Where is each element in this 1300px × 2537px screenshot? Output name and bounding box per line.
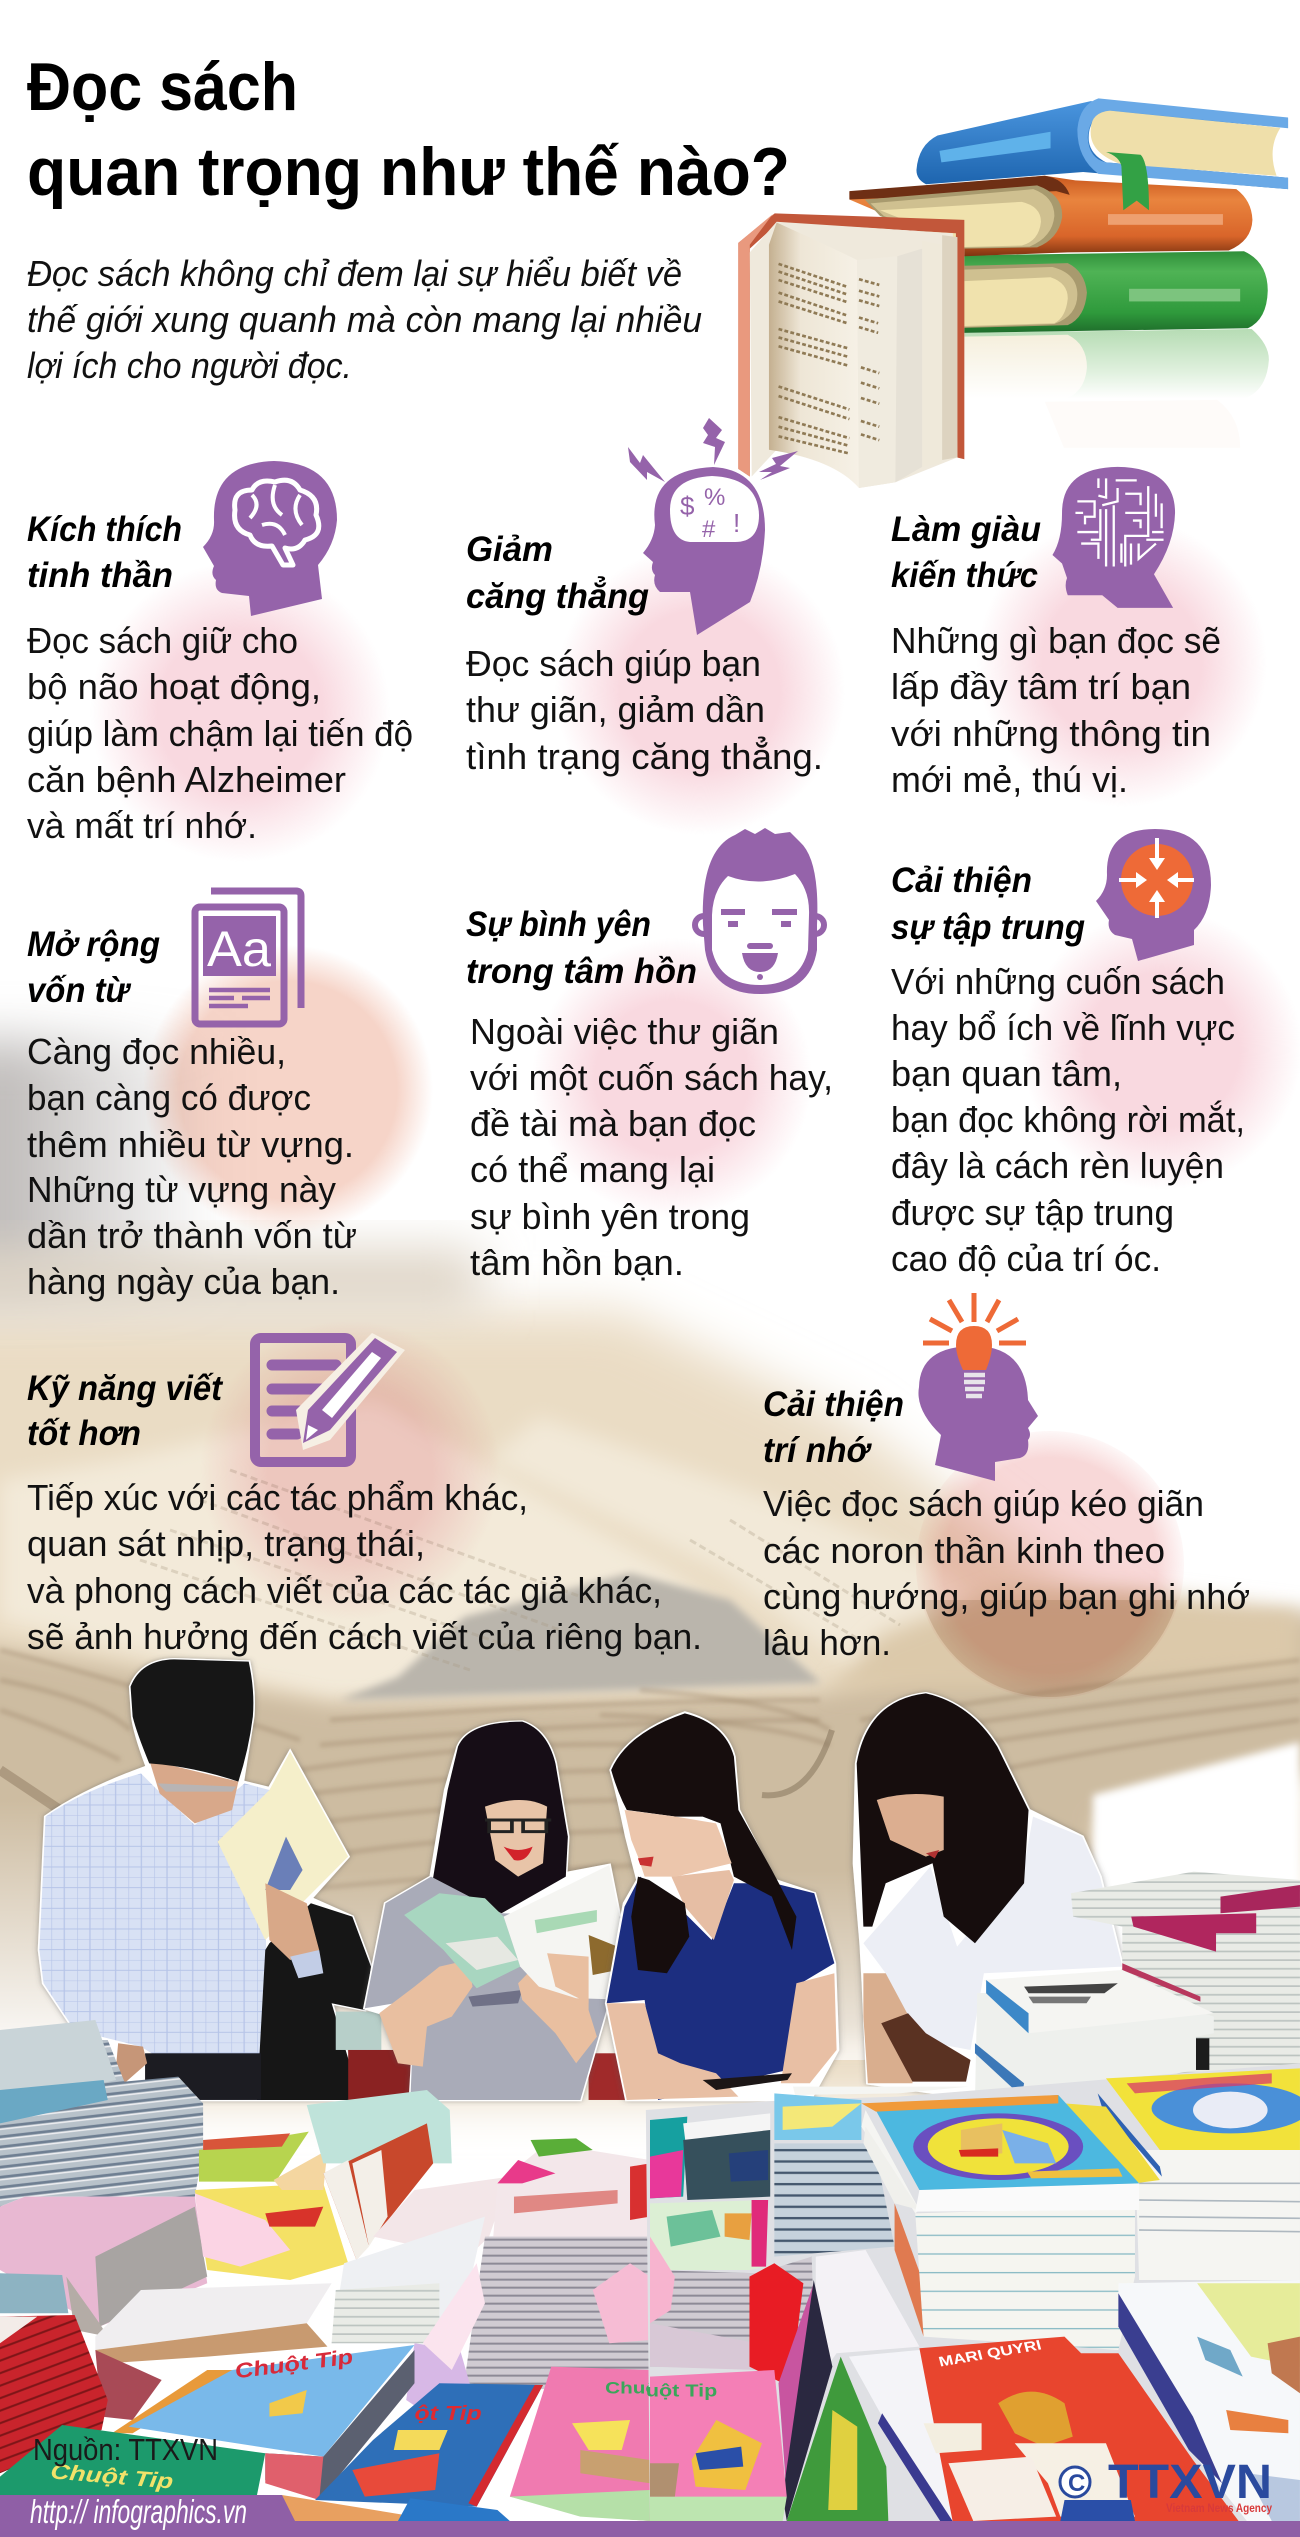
photo: books on table, right: uột Tip — [646, 2382, 717, 2401]
body text: lâu hơn. — [763, 1622, 891, 1663]
body text — [891, 620, 1221, 800]
heading: Giảm — [466, 530, 553, 569]
body text: căn bệnh Alzheimer — [27, 759, 346, 800]
logo: TTXVN: Vietnam News Agency — [1166, 2501, 1272, 2515]
body text: thư giãn, giảm dần — [466, 689, 765, 730]
body text: Tiếp xúc với các tác phẩm khác, — [27, 1477, 528, 1518]
body text: quan sát nhịp, trạng thái, — [27, 1523, 425, 1564]
photo: books on table, right: MARI QUYRI — [937, 2338, 1043, 2370]
heading: Sự bình yên — [466, 905, 651, 944]
bookmark — [1106, 152, 1149, 210]
printed text — [779, 264, 879, 454]
body text: Đọc sách giúp bạn — [466, 643, 761, 684]
body text: tình trạng căng thẳng. — [466, 735, 823, 777]
body text: dần trở thành vốn từ — [27, 1215, 357, 1256]
heading: Cải thiện — [891, 861, 1032, 900]
photo: man and girl reading — [39, 1659, 650, 2100]
icon: stressed head: % — [704, 484, 725, 511]
footer bar: http:// infographics.vn — [30, 2493, 247, 2530]
heading — [466, 530, 649, 616]
heading: trí nhớ — [763, 1431, 872, 1470]
pages — [750, 222, 957, 488]
icon: stressed head: $ — [680, 491, 695, 521]
background: open book photo — [0, 517, 1300, 2100]
book page text hints — [140, 1470, 900, 1670]
body text: thêm nhiều từ vựng. — [27, 1124, 354, 1165]
photo: books on table, left: Chuột Tip — [233, 2345, 355, 2383]
footer bar — [0, 2493, 1300, 2537]
heading — [763, 1385, 904, 1470]
title: quan trọng như thế nào? — [27, 134, 790, 210]
body text: được sự tập trung — [891, 1192, 1174, 1233]
intro text: lợi ích cho người đọc. — [27, 345, 352, 386]
heading: Cải thiện — [763, 1385, 904, 1424]
body text: bạn quan tâm, — [891, 1053, 1122, 1094]
heading: sự tập trung — [891, 908, 1085, 947]
blue book — [916, 101, 1288, 189]
panel: Sự bình yên trong tâm hồn — [466, 828, 833, 1283]
photo: books on table, left: Chuột — [605, 2378, 666, 2397]
body text: hàng ngày của bạn. — [27, 1261, 340, 1302]
photo: books on table, left: Chuột Tip — [49, 2460, 175, 2494]
body text: Ngoài việc thư giãn — [470, 1011, 779, 1052]
illustration: stacked books and open book — [738, 98, 1288, 488]
heading: Làm giàu — [891, 510, 1041, 549]
heading: căng thẳng — [466, 576, 649, 616]
body text — [763, 1483, 1250, 1663]
panel: Mở rộng vốn từ — [27, 891, 357, 1302]
icon: stressed head — [628, 418, 798, 635]
body text: giúp làm chậm lại tiến độ — [27, 713, 413, 754]
icon: vocabulary pages: Aa — [207, 921, 271, 977]
heading: kiến thức — [891, 556, 1038, 595]
body text: đề tài mà bạn đọc — [470, 1103, 756, 1144]
icon: head with circuit — [1052, 467, 1175, 608]
body text — [891, 961, 1245, 1279]
body text: và phong cách viết của các tác giả khác, — [27, 1570, 662, 1611]
body text: Việc đọc sách giúp kéo giãn — [763, 1483, 1204, 1524]
photo: books on table, left — [0, 2020, 666, 2521]
heading — [27, 510, 182, 595]
panel: Kích thích tinh thần — [27, 461, 413, 846]
body text: với những thông tin — [891, 713, 1211, 754]
icon: stressed head: # — [702, 516, 716, 543]
heading — [466, 905, 697, 991]
heading: Kích thích — [27, 510, 182, 549]
body text — [27, 1477, 702, 1657]
icon: head with brain — [203, 461, 337, 616]
body text: cùng hướng, giúp bạn ghi nhớ — [763, 1576, 1250, 1617]
body text: bạn đọc không rời mắt, — [891, 1099, 1245, 1140]
man — [39, 1659, 371, 2100]
heading — [891, 510, 1041, 595]
orange book — [849, 176, 1252, 256]
intro text: Đọc sách không chỉ đem lại sự hiểu biết về — [27, 253, 682, 294]
reflection — [964, 329, 1269, 399]
body text: bộ não hoạt động, — [27, 666, 321, 707]
panel: Giảm căng thẳng — [466, 418, 823, 777]
body text: đây là cách rèn luyện — [891, 1145, 1224, 1186]
body text: lấp đầy tâm trí bạn — [891, 666, 1191, 707]
source note: Nguồn: TTXVN — [33, 2432, 218, 2467]
panel: Cải thiện trí nhớ — [763, 1293, 1250, 1663]
logo: TTXVN — [1060, 2456, 1272, 2515]
page edges — [0, 1650, 1300, 1890]
icon: vocabulary pages — [195, 891, 301, 1024]
heading — [891, 861, 1085, 947]
body text — [466, 643, 823, 777]
body text: sẽ ảnh hưởng đến cách viết của riêng bạn. — [27, 1616, 702, 1657]
photo: books on table, left: ột Tip — [414, 2402, 482, 2424]
girl with bangs — [607, 1713, 837, 2100]
body text: bạn càng có được — [27, 1077, 311, 1118]
icon: stressed head: ! — [733, 508, 740, 538]
panel: Kỹ năng viết tốt hơn — [27, 1333, 702, 1657]
body text: tâm hồn bạn. — [470, 1242, 684, 1283]
open book cover — [738, 213, 964, 477]
body text — [27, 1031, 357, 1302]
title — [27, 49, 790, 210]
white fades — [0, 1800, 70, 2070]
body text: Càng đọc nhiều, — [27, 1031, 286, 1072]
heading — [27, 1369, 223, 1453]
body text: sự bình yên trong — [470, 1196, 750, 1237]
icon: calm face — [695, 828, 824, 994]
heading: Kỹ năng viết — [27, 1369, 223, 1408]
girl in white shirt — [854, 1693, 1122, 2100]
heading: tốt hơn — [27, 1414, 141, 1453]
logo: TTXVN: TTXVN — [1108, 2456, 1272, 2509]
background stack and table — [336, 2012, 381, 2050]
photo: books on table, right — [646, 2063, 1300, 2521]
heading: Mở rộng — [27, 925, 160, 964]
pink circles — [90, 517, 1300, 1699]
body text: Những từ vựng này — [27, 1169, 336, 1210]
body text — [470, 1011, 833, 1283]
body text: cao độ của trí óc. — [891, 1238, 1161, 1279]
heading: tinh thần — [27, 556, 173, 595]
green book — [964, 251, 1268, 333]
body text: và mất trí nhớ. — [27, 805, 257, 846]
body text: mới mẻ, thú vị. — [891, 759, 1128, 800]
right book stacks — [975, 1872, 1300, 2100]
body text: các noron thần kinh theo — [763, 1530, 1165, 1571]
heading: trong tâm hồn — [466, 952, 697, 991]
body text: Với những cuốn sách — [891, 961, 1225, 1002]
icon: head with target — [1096, 829, 1211, 961]
title: Đọc sách — [27, 49, 298, 125]
intro text: thế giới xung quanh mà còn mang lại nhiều — [27, 299, 702, 340]
photo: two girls and book stacks — [607, 1693, 1300, 2100]
body text: Những gì bạn đọc sẽ — [891, 620, 1221, 661]
body text: có thể mang lại — [470, 1149, 715, 1190]
intro text — [27, 253, 702, 386]
panel: Cải thiện sự tập trung — [891, 829, 1245, 1279]
body text: hay bổ ích về lĩnh vực — [891, 1007, 1235, 1048]
body text: với một cuốn sách hay, — [470, 1057, 833, 1098]
body text: Đọc sách giữ cho — [27, 620, 298, 661]
panel: Làm giàu kiến thức — [891, 467, 1221, 800]
icon: head with light bulb — [918, 1293, 1038, 1481]
icon: notepad and pencil — [255, 1333, 405, 1462]
heading — [27, 925, 160, 1010]
girl with glasses — [365, 1722, 636, 2100]
heading: vốn từ — [27, 971, 132, 1010]
body text — [27, 620, 413, 846]
logo: TTXVN: C — [1068, 2470, 1085, 2497]
